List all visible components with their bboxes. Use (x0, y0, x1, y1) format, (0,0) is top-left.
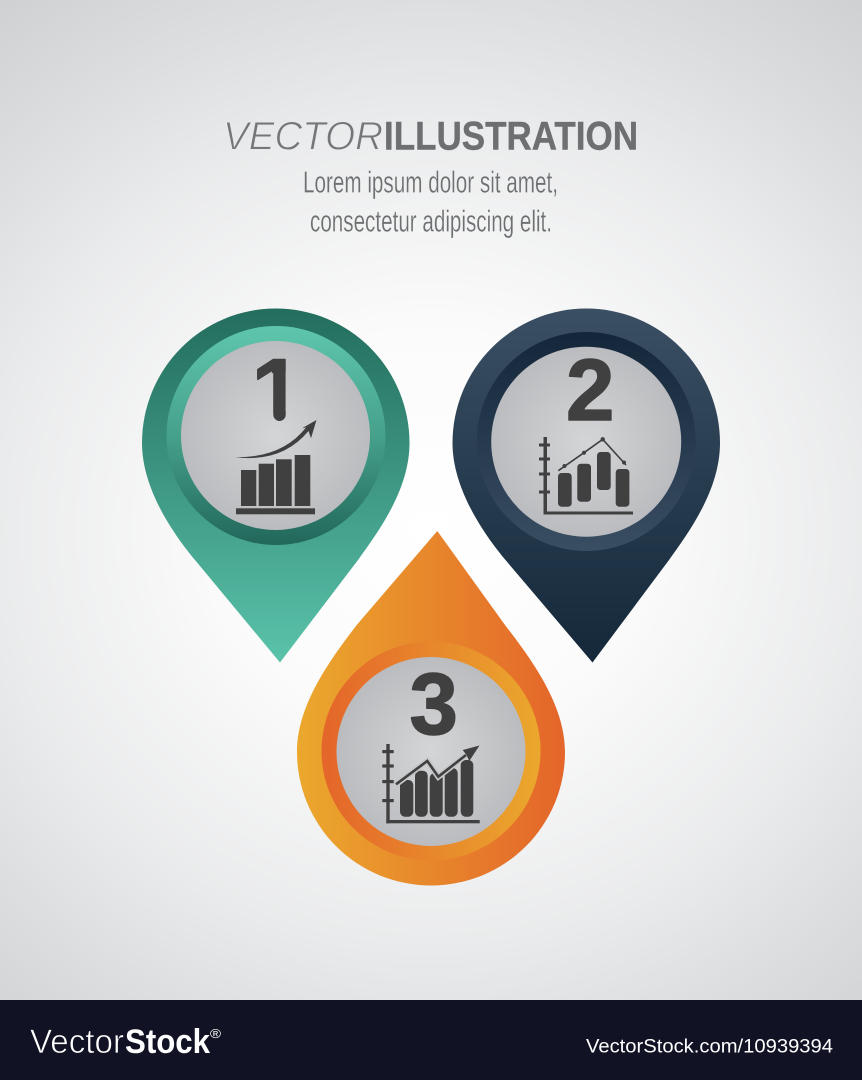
pin 1: green (142, 308, 410, 662)
subtitle text (303, 164, 558, 238)
pin 3 body (297, 531, 565, 886)
title: VECTOR (223, 114, 383, 158)
subtitle text: Lorem ipsum dolor sit amet, (303, 164, 558, 200)
pin 1 ring (166, 326, 386, 545)
title: ILLUSTRATION (384, 114, 638, 158)
pin 2 body (452, 308, 720, 662)
pin 1 inner disc (181, 341, 370, 530)
pin 3 ring (322, 642, 540, 860)
pin 2 inner disc (491, 347, 681, 537)
icon: candlestick chart (539, 437, 633, 514)
pin 2 ring (477, 332, 696, 551)
footer url: VectorStock.com/10939394 (586, 1037, 833, 1058)
title (223, 114, 638, 158)
icon: rising bar chart (235, 420, 316, 514)
footer logo: Vector (30, 1023, 124, 1061)
subtitle text: consectetur adipiscing elit. (310, 204, 552, 238)
pin 2: navy (452, 308, 720, 662)
footer logo: ® (210, 1026, 221, 1041)
number 3: 3 (410, 656, 458, 753)
number 1: 1 (252, 342, 302, 442)
footer logo (30, 1023, 221, 1061)
pin 3: orange (297, 531, 565, 886)
pin 3 inner disc (336, 657, 526, 846)
footer logo: Stock (125, 1023, 210, 1061)
pin 1 body (142, 308, 410, 662)
number 2: 2 (566, 342, 614, 439)
footer bar (0, 1000, 862, 1080)
icon: growth chart (382, 744, 480, 823)
